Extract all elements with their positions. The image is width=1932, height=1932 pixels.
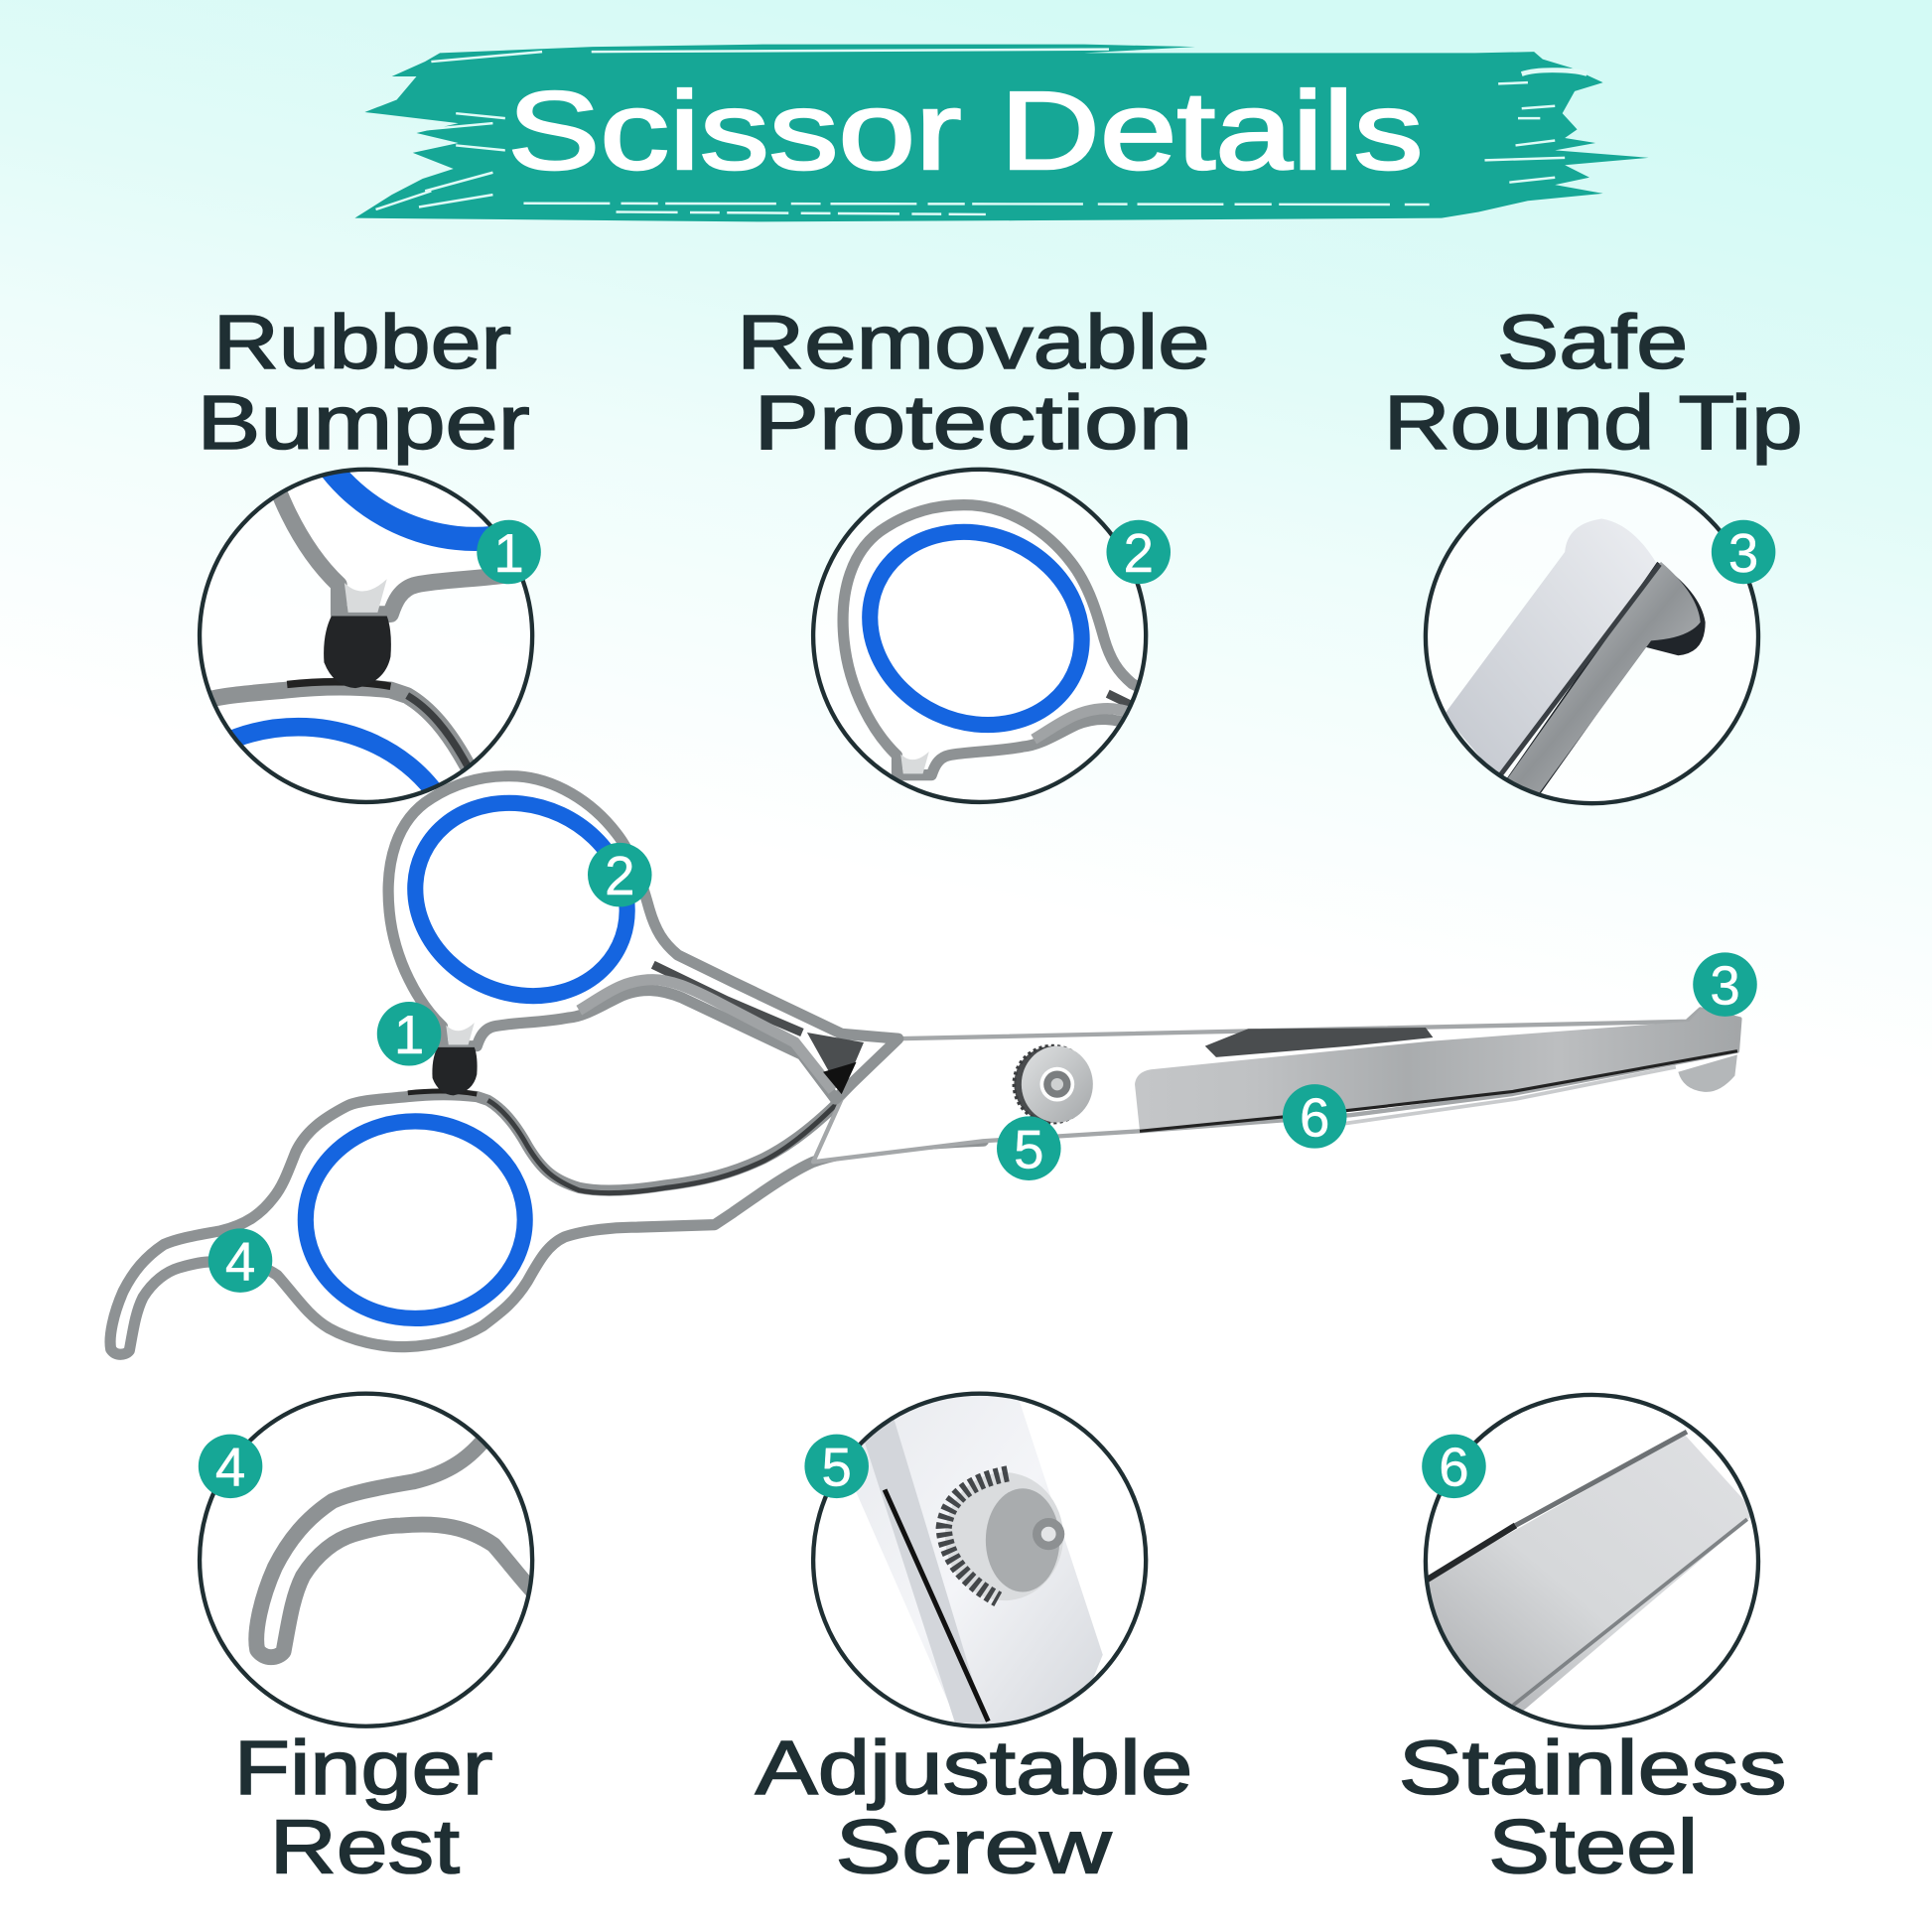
badge 5 on scissors: 5 xyxy=(1014,1120,1043,1180)
heading: Finger Rest: Rest xyxy=(270,1804,460,1889)
heading: Adjustable Screw: Screw xyxy=(835,1804,1112,1889)
badge 4 on scissors xyxy=(208,1228,272,1293)
main scissors illustration xyxy=(110,768,1739,1354)
heading: Rubber Bumper: Bumper xyxy=(198,380,530,466)
badge 3 on scissors: 3 xyxy=(1710,955,1740,1016)
detail badge 5: 5 xyxy=(821,1438,852,1498)
heading: Removable Protection: Protection xyxy=(755,380,1192,466)
badge 6 on scissors: 6 xyxy=(1300,1087,1329,1148)
detail badge 3: 3 xyxy=(1728,523,1758,584)
detail badge 4 xyxy=(199,1435,262,1498)
title banner xyxy=(354,45,1649,221)
detail circle 1: rubber bumper xyxy=(197,467,534,804)
badge 2 on scissors xyxy=(588,843,652,906)
detail badge 1 xyxy=(477,520,541,584)
heading: Removable Protection: Removable xyxy=(737,300,1210,385)
heading: Stainless Steel: Stainless xyxy=(1399,1725,1787,1811)
lower blue ring xyxy=(306,1121,525,1318)
heading: Safe Round Tip xyxy=(1384,300,1803,466)
adjustment screw xyxy=(1014,1046,1093,1123)
heading: Safe Round Tip: Round Tip xyxy=(1384,380,1803,466)
detail circle 4: finger rest xyxy=(197,1392,534,1728)
heading: Rubber Bumper: Rubber xyxy=(213,300,511,385)
central body and lower blade edge xyxy=(813,1009,1739,1162)
detail badge 1: 1 xyxy=(493,523,524,584)
heading: Removable Protection xyxy=(737,300,1210,466)
detail badge 3 xyxy=(1712,520,1775,584)
badge 6 on scissors xyxy=(1283,1084,1346,1149)
badge 1 on scissors: 1 xyxy=(394,1005,424,1065)
heading: Stainless Steel: Steel xyxy=(1488,1804,1698,1889)
badge 4 on scissors: 4 xyxy=(225,1231,255,1292)
detail badge 6 xyxy=(1422,1435,1486,1498)
detail circle 5: adjustable screw xyxy=(813,1386,1146,1731)
rubber bumper xyxy=(432,1047,478,1095)
detail badge 6: 6 xyxy=(1439,1438,1469,1498)
badge 5 on scissors xyxy=(997,1116,1061,1180)
lower handle with finger rest xyxy=(110,1091,983,1354)
heading: Adjustable Screw xyxy=(756,1725,1192,1889)
badge 3 on scissors xyxy=(1693,952,1757,1017)
detail circle 2: removable protection ring xyxy=(810,467,1148,804)
heading: Adjustable Screw: Adjustable xyxy=(756,1725,1192,1811)
heading: Safe Round Tip: Safe xyxy=(1497,300,1688,385)
serrated blade shadow xyxy=(1205,1028,1433,1057)
badge 1 on scissors xyxy=(377,1002,441,1066)
heading: Finger Rest xyxy=(234,1725,492,1889)
detail badge 2: 2 xyxy=(1124,523,1154,584)
heading: Finger Rest: Finger xyxy=(234,1725,492,1811)
title text: Scissor Details xyxy=(507,69,1423,193)
detail badge 2 xyxy=(1106,520,1171,584)
detail badge 5 xyxy=(804,1435,869,1498)
detail badge 4: 4 xyxy=(215,1438,245,1498)
heading: Rubber Bumper xyxy=(198,300,530,466)
badge 2 on scissors: 2 xyxy=(605,846,634,906)
detail circle 6: stainless steel xyxy=(1417,1395,1758,1727)
heading: Stainless Steel xyxy=(1399,1725,1787,1889)
upper handle xyxy=(383,768,898,1099)
rounded lower tip xyxy=(1678,1054,1737,1092)
detail circle 3: safe round tip xyxy=(1426,471,1758,803)
brush stroke xyxy=(354,45,1649,221)
blade with stainless finish xyxy=(1135,1009,1739,1131)
